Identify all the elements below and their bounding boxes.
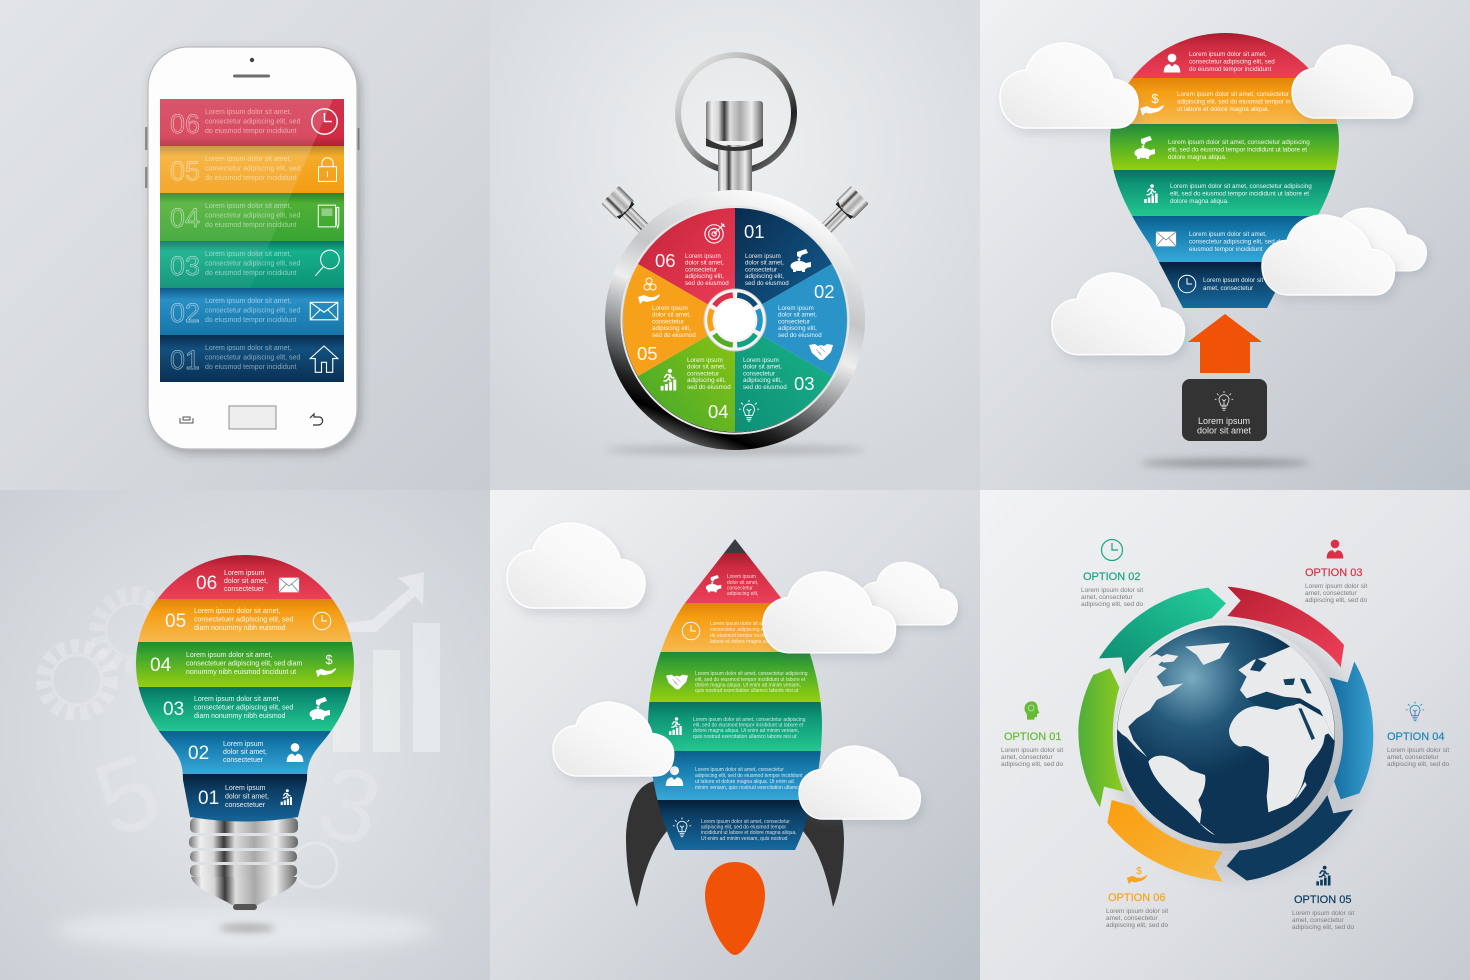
sector 03 — [735, 320, 832, 432]
sector 01: Lorem ipsum — [745, 253, 781, 260]
rocket band blue content: minim veniam, quis nostrud exercitation ullamco — [695, 785, 802, 791]
band 05: do eiusmod tempor incididunt — [205, 175, 296, 182]
option 01: amet, consectetur — [1001, 754, 1053, 761]
arrow option 04 — [1329, 662, 1373, 799]
ghost background graphics — [43, 572, 440, 887]
sector 01: consectetur — [745, 266, 777, 273]
ghost bars — [333, 623, 440, 752]
band 01 — [160, 335, 344, 382]
option 04: OPTION 04 — [1387, 731, 1444, 743]
cloud lower left — [1052, 273, 1184, 355]
mediterranean and inland seas — [1247, 658, 1315, 740]
right pusher — [814, 186, 869, 241]
option 02: Lorem ipsum dolor sit — [1081, 587, 1143, 594]
rocket band red content: adipiscing elit, — [727, 591, 758, 597]
sector 02: consectetur — [778, 318, 810, 325]
ghost gear right — [97, 594, 169, 666]
rocket band red content: dolor sit amet, — [727, 580, 758, 586]
rocket band navy content: adipiscing elit, sed do eiusmod tempor — [701, 824, 786, 830]
cloud top left — [1000, 43, 1138, 128]
rocket band orange content — [682, 621, 778, 645]
rocket band navy content: Lorem ipsum dolor sit amet, consectetur — [701, 819, 790, 825]
band 06: 06 — [170, 109, 200, 139]
cloud front right — [1262, 215, 1394, 295]
menu key — [180, 417, 193, 423]
bulb band 03 content: Lorem ipsum dolor sit amet, — [194, 696, 280, 703]
balloon band 3 content — [1134, 136, 1310, 161]
bulb band 05 content: diam nonummy nibh euismod — [194, 625, 286, 632]
rocket body bands — [640, 539, 830, 850]
arrow option 03 — [1227, 587, 1344, 667]
rocket band orange content: Lorem ipsum dolor sit amet, — [710, 621, 772, 627]
ghost clock — [293, 843, 337, 887]
rocket band navy content: Ut enim ad minim veniam, quis nostrud — [701, 836, 788, 842]
balloon band 1 content: consectetur adipiscing elit, sed — [1189, 58, 1275, 66]
ghost numerals: 3 — [307, 743, 393, 870]
band 04 — [160, 193, 344, 241]
bulb band 01 content: 01 — [198, 788, 219, 809]
balloon band 5 content: eiusmod tempor incididunt — [1189, 246, 1263, 253]
cloud front right — [763, 572, 895, 653]
rocket band blue content: Lorem ipsum dolor sit amet, consectetur — [695, 767, 784, 773]
home button — [229, 406, 276, 429]
balloon band 4 content: dolore magna aliqua. — [1170, 198, 1229, 205]
rocket band teal content: elit, sed do eiusmod tempor incididunt ut labore et — [693, 722, 804, 728]
balloon band 2 content — [1140, 91, 1291, 116]
balloon band 4 content: elit, sed do eiusmod tempor incididunt ut labore et — [1170, 190, 1309, 198]
cloud top right — [1292, 45, 1413, 118]
phone side buttons — [145, 127, 360, 188]
option 03: Lorem ipsum dolor sit — [1305, 583, 1367, 590]
band 04: consectetur adipiscing elit, sed — [205, 212, 300, 220]
band 01: consectetur adipiscing elit, sed — [205, 354, 300, 362]
screen bands — [160, 99, 344, 382]
option 06: OPTION 06 — [1108, 892, 1165, 904]
band 02: Lorem ipsum dolor sit amet, — [205, 298, 291, 305]
option 02 — [1081, 540, 1144, 608]
sector 05: consectetur — [652, 318, 684, 325]
globe continents — [1115, 642, 1337, 835]
band 06: Lorem ipsum dolor sit amet, — [205, 109, 291, 116]
screen gloss — [160, 99, 333, 288]
option 01: OPTION 01 — [1004, 731, 1061, 743]
balloon band 5 content: consectetur adipiscing elit, sed do — [1189, 238, 1284, 246]
rocket band orange content: labore et dolore magna aliqua — [710, 639, 776, 645]
balloon band 5 content — [1156, 231, 1284, 253]
rocket band teal content — [669, 717, 806, 740]
crown — [706, 101, 763, 197]
band 03: Lorem ipsum dolor sit amet, — [205, 251, 291, 258]
dark basket box — [1182, 379, 1267, 441]
option 04 — [1387, 702, 1450, 768]
arrow option 02 — [1099, 588, 1226, 674]
option 04: Lorem ipsum dolor sit — [1387, 747, 1449, 754]
option 03 — [1305, 540, 1368, 604]
globe ocean — [1117, 626, 1335, 844]
bulb band 03 content: diam nonummy nibh euismod — [194, 713, 286, 720]
globe panel background — [980, 490, 1470, 980]
bulb band 05 content: Lorem ipsum dolor sit amet, — [194, 608, 280, 615]
bulb band 04 content — [150, 652, 336, 677]
option 06: amet, consectetur — [1106, 915, 1158, 922]
sector 02: Lorem ipsum — [778, 305, 814, 312]
bulb glass bands — [130, 555, 360, 826]
sector 04: dolor sit amet, — [687, 364, 726, 371]
bulb band 04 content: Lorem ipsum dolor sit amet, — [186, 652, 272, 659]
bulb band 02 content: 02 — [188, 743, 209, 764]
option 05: OPTION 05 — [1294, 894, 1351, 906]
balloon band 2 content: $ — [1151, 91, 1159, 106]
balloon band 3 content: Lorem ipsum dolor sit amet, consectetur adipiscing — [1168, 139, 1310, 146]
camera — [250, 58, 254, 62]
band 03: do eiusmod tempor incididunt — [205, 270, 296, 277]
bulb band 03 content — [163, 696, 330, 720]
balloon band 1 content: do eiusmod tempor incididunt — [1189, 66, 1272, 73]
eurasia — [1238, 642, 1337, 743]
panel: hot air balloon — [980, 0, 1470, 490]
ground shadow — [219, 925, 275, 931]
sector 03: dolor sit amet, — [743, 364, 782, 371]
cloud back right — [858, 562, 957, 625]
sector 06: 06 — [655, 250, 676, 271]
band 05: Lorem ipsum dolor sit amet, — [205, 156, 291, 163]
option 01: Lorem ipsum dolor sit — [1001, 747, 1063, 754]
rocket band red content: Lorem ipsum — [727, 574, 756, 580]
option 03: amet, consectetur — [1305, 590, 1357, 597]
option 03: adipiscing elit, sed do — [1305, 597, 1368, 604]
rocket band navy content: incididunt ut labore et dolore magna aliqua. — [701, 830, 797, 836]
band 05 — [160, 146, 344, 193]
bulb band 01 content — [198, 785, 292, 809]
bulb band 05 content — [165, 608, 331, 632]
band 01: do eiusmod tempor incididunt — [205, 364, 296, 371]
bulb panel background — [0, 490, 490, 980]
sector 06: Lorem ipsum — [685, 253, 721, 260]
cloud lower right — [799, 746, 920, 819]
bulb band 02 content — [188, 741, 303, 764]
ghost numerals — [80, 731, 393, 870]
ghost growth arrow — [330, 572, 424, 632]
stopwatch panel background — [490, 0, 980, 490]
rocket band blue content — [666, 766, 803, 791]
sector 04: consectetur — [687, 370, 719, 377]
bulb band 01 content: Lorem ipsum — [225, 785, 266, 792]
band 06: consectetur adipiscing elit, sed — [205, 118, 300, 126]
rocket band blue content: adipiscing elit, sed do eiusmod tempor incididunt — [695, 773, 803, 779]
phone panel background — [0, 0, 490, 490]
sector 03: 03 — [794, 373, 815, 394]
option 05: Lorem ipsum dolor sit — [1292, 910, 1354, 917]
sector 05 — [623, 264, 735, 376]
rocket band red content — [706, 574, 758, 597]
bulb band 02 content: dolor sit amet, — [223, 749, 267, 756]
greenland — [1185, 643, 1230, 665]
ground glow — [55, 910, 435, 950]
sector 05: dolor sit amet, — [652, 312, 691, 319]
rocket panel background — [490, 490, 980, 980]
speaker — [233, 74, 270, 78]
bulb band 06 content: 06 — [196, 573, 217, 594]
rocket band green content — [666, 671, 808, 694]
rocket band red content: consectetur — [727, 586, 753, 592]
north america — [1115, 654, 1183, 757]
bulb band 01 content: consectetuer — [225, 802, 266, 809]
sector 03: adipiscing elit, — [743, 377, 782, 384]
bulb band 03 content: 03 — [163, 699, 184, 720]
sector 03: consectetur — [743, 370, 775, 377]
option 06: adipiscing elit, sed do — [1106, 922, 1169, 929]
sector 06: sed do eiusmod — [685, 280, 729, 287]
bulb band 06 content — [196, 570, 299, 594]
bulb band 04 content: nonummy nibh euismod tincidunt ut — [186, 669, 296, 676]
cloud middle left — [553, 702, 674, 776]
panel: rocket — [490, 490, 980, 980]
option 06 — [1106, 866, 1169, 929]
band 05: 05 — [170, 156, 200, 186]
metal case — [614, 199, 856, 441]
balloon band 3 content: elit, sed do eiusmod tempor incididunt ut labore et — [1168, 146, 1307, 154]
sector 02: dolor sit amet, — [778, 312, 817, 319]
dark basket box: dolor sit amet — [1197, 426, 1252, 436]
band 02: 02 — [170, 298, 200, 328]
ground shadow — [1140, 460, 1310, 466]
band 02 — [160, 288, 344, 335]
option 01 — [1001, 701, 1064, 768]
phone body — [148, 47, 357, 449]
arrow option 01 — [1078, 668, 1124, 807]
sector 02: 02 — [814, 281, 835, 302]
left pusher — [601, 186, 656, 241]
back key — [310, 414, 323, 425]
arrow option 06 — [1107, 800, 1223, 882]
bulb band 06 content: consectetuer — [224, 586, 265, 593]
sector 04: Lorem ipsum — [687, 357, 723, 364]
bulb band 05 content: 05 — [165, 611, 186, 632]
sector 01 — [735, 208, 832, 320]
balloon band 2 content: Lorem ipsum dolor sit amet, consectetur — [1177, 91, 1289, 98]
rocket band teal content: Lorem ipsum dolor sit amet, consectetur adipiscing — [693, 717, 806, 723]
arrow option 05 — [1227, 795, 1353, 881]
balloon band 6 content: Lorem ipsum dolor sit — [1203, 277, 1263, 284]
rocket band teal content: quis nostrud exercitation ullamco laboris nisi ut — [693, 734, 797, 740]
sector 05: sed do eiusmod — [652, 332, 696, 339]
sector 06 — [638, 208, 735, 320]
sector 05: 05 — [637, 343, 658, 364]
rocket band green content: quis nostrud exercitation ullamco laboris nisi ut — [695, 688, 799, 694]
sector 05: Lorem ipsum — [652, 305, 688, 312]
rocket band blue content: ut labore et dolore magna aliqua. Ut enim ad — [695, 779, 794, 785]
sector 01: sed do eiusmod — [745, 280, 789, 287]
band 04: Lorem ipsum dolor sit amet, — [205, 203, 291, 210]
panel: light bulb — [0, 490, 490, 980]
balloon band 6 content — [1178, 275, 1263, 293]
rocket band navy content — [673, 818, 797, 842]
sector 03: Lorem ipsum — [743, 357, 779, 364]
balloon band 4 content: Lorem ipsum dolor sit amet, consectetur adipiscing — [1170, 183, 1312, 190]
right fin — [802, 781, 844, 907]
bulb band 04 content: 04 — [150, 655, 172, 676]
option 02: OPTION 02 — [1083, 571, 1140, 583]
sector 05: adipiscing elit, — [652, 325, 691, 332]
option 05 — [1292, 866, 1355, 931]
bulb band 04 content: consectetuer adipiscing elit, sed diam — [186, 660, 303, 668]
band 06 — [160, 99, 344, 146]
band 06: do eiusmod tempor incididunt — [205, 128, 296, 135]
rocket band teal content: dolore magna aliqua. Ut enim ad minim veniam, — [693, 728, 799, 734]
option 06: $ — [1136, 866, 1142, 877]
sector 01: 01 — [744, 221, 765, 242]
band 04: 04 — [170, 203, 200, 233]
bulb band 02 content: consectetuer — [223, 757, 264, 764]
option 05: amet, consectetur — [1292, 917, 1344, 924]
balloon panel background — [980, 0, 1470, 490]
band 04: do eiusmod tempor incididunt — [205, 222, 296, 229]
band 02: do eiusmod tempor incididunt — [205, 317, 296, 324]
sector 04: 04 — [708, 401, 729, 422]
option 04: adipiscing elit, sed do — [1387, 761, 1450, 768]
left fin — [626, 781, 668, 907]
bulb band 03 content: consectetuer adipiscing elit, sed — [194, 704, 293, 712]
balloon band 1 content — [1164, 51, 1275, 73]
bulb band 04 content: $ — [325, 652, 333, 667]
ghost gear left — [43, 646, 111, 714]
sector 02 — [735, 264, 847, 376]
bulb screw base — [189, 818, 298, 910]
sector 06: consectetur — [685, 266, 717, 273]
africa and middle east — [1229, 703, 1337, 812]
rocket band orange content: do eiusmod tempor incididunt — [710, 633, 776, 639]
cloud back right — [1316, 208, 1426, 271]
dark basket box: Lorem ipsum — [1198, 416, 1250, 426]
option 02: adipiscing elit, sed do — [1081, 601, 1144, 608]
band 01: 01 — [170, 345, 200, 375]
option 06: Lorem ipsum dolor sit — [1106, 908, 1168, 915]
sector 04: adipiscing elit, — [687, 377, 726, 384]
band 03: consectetur adipiscing elit, sed — [205, 260, 300, 268]
balloon band 3 content: dolore magna aliqua. — [1168, 154, 1227, 161]
panel: globe cycle — [980, 490, 1470, 980]
panel: stopwatch — [490, 0, 980, 490]
arctic islands — [1162, 654, 1178, 663]
centre hub — [704, 289, 766, 351]
band 05: consectetur adipiscing elit, sed — [205, 166, 300, 172]
balloon band 1 content: Lorem ipsum dolor sit amet, — [1189, 51, 1267, 58]
sector 02: adipiscing elit, — [778, 325, 817, 332]
band 03: 03 — [170, 251, 200, 281]
balloon band 5 content: Lorem ipsum dolor sit amet, — [1189, 231, 1267, 238]
band 01: Lorem ipsum dolor sit amet, — [205, 345, 291, 352]
sector 06: dolor sit amet, — [685, 260, 724, 267]
sector 06: adipiscing elit, — [685, 273, 724, 280]
bulb band 06 content: dolor sit amet, — [224, 578, 268, 585]
soft shadow under ring — [1112, 624, 1368, 880]
band 02: consectetur adipiscing elit, sed — [205, 308, 300, 314]
bulb band 05 content: consectetuer adipiscing elit, sed — [194, 616, 293, 624]
ghost numerals: 5 — [80, 731, 174, 860]
globe rim — [1115, 623, 1343, 851]
sector 02: sed do eiusmod — [778, 332, 822, 339]
hanging loop — [678, 55, 794, 171]
south america — [1148, 756, 1215, 835]
flame — [705, 862, 765, 955]
sector 01: adipiscing elit, — [745, 273, 784, 280]
bulb band 02 content: Lorem ipsum — [223, 741, 264, 748]
rocket band orange content: consectetur adipiscing elit, sed — [710, 627, 778, 633]
panel: smartphone — [0, 0, 490, 490]
option 05: adipiscing elit, sed do — [1292, 924, 1355, 931]
rocket band green content: dolore magna aliqua. Ut enim ad minim veniam, — [695, 682, 801, 688]
orange up arrow — [1188, 314, 1262, 373]
option 03: OPTION 03 — [1305, 567, 1362, 579]
ground shadow — [605, 445, 865, 455]
balloon envelope — [1100, 33, 1350, 308]
balloon band 6 content: amet, consectetur — [1203, 285, 1253, 292]
rocket band green content: Lorem ipsum dolor sit amet, consectetur adipiscing — [695, 671, 808, 677]
band 03 — [160, 241, 344, 288]
madagascar — [1295, 782, 1307, 799]
cycle arrows — [1078, 587, 1373, 882]
option 04: amet, consectetur — [1387, 754, 1439, 761]
balloon band 2 content: ut labore et dolore magna aliqua. — [1177, 106, 1269, 113]
bulb band 06 content: Lorem ipsum — [224, 570, 265, 577]
sector 04 — [638, 320, 735, 432]
sector 01: dolor sit amet, — [745, 260, 784, 267]
balloon band 2 content: adipiscing elit, sed do eiusmod tempor in — [1177, 98, 1291, 106]
cloud top left — [507, 523, 645, 608]
bulb band 01 content: dolor sit amet, — [225, 794, 269, 800]
option 01: adipiscing elit, sed do — [1001, 761, 1064, 768]
sector 04: sed do eiusmod — [687, 384, 731, 391]
rocket band green content: elit, sed do eiusmod tempor incididunt ut labore et — [695, 677, 806, 683]
option 02: amet, consectetur — [1081, 594, 1133, 601]
sector 03: sed do eiusmod — [743, 384, 787, 391]
balloon band 4 content — [1144, 183, 1312, 205]
